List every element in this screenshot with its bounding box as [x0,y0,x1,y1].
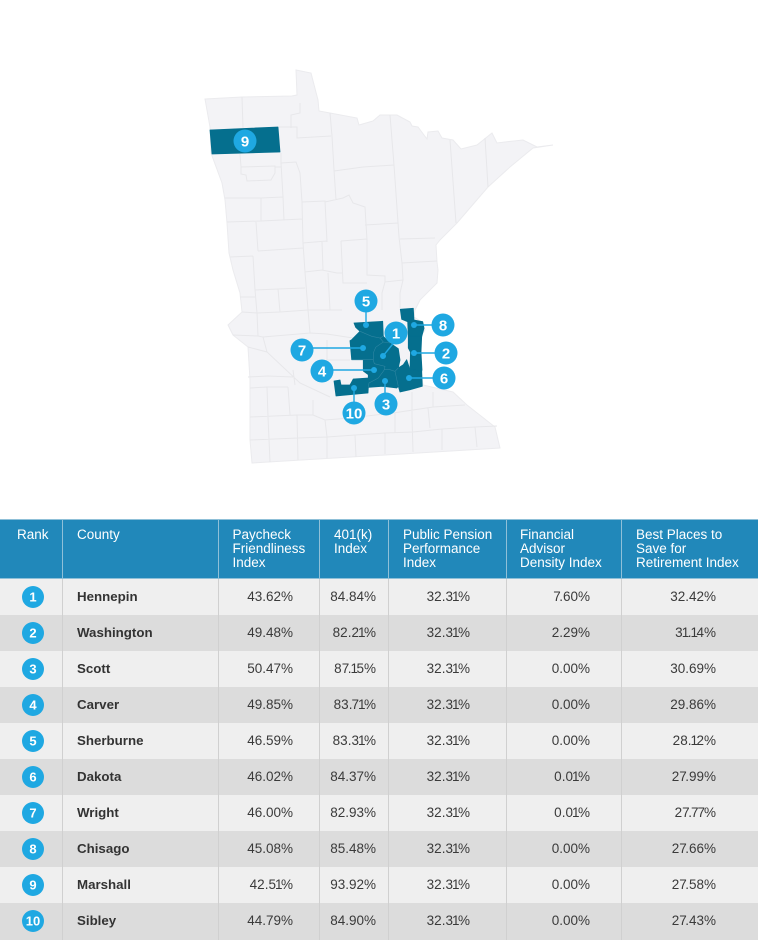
county boundaries [225,97,497,462]
row 10: Sibley: 32.31% [427,913,470,928]
row 8: Chisago: 27.66% [672,841,716,856]
table header: Best Places to [636,527,722,542]
row 4: Carver: 32.31% [427,697,470,712]
row 10: Sibley: 27.43% [672,913,716,928]
row 9: Marshall: 32.31% [427,877,470,892]
row 1: Hennepin: 7.60% [553,589,590,604]
row 5: Sherburne [22,730,716,752]
table header: Density Index [520,555,602,570]
state outline [205,70,553,463]
row 9: Marshall: Marshall [77,877,131,892]
table header: 401(k) [334,527,372,542]
row 8: Chisago: 85.48% [330,841,376,856]
table header: Financial [520,527,574,542]
row 1: Hennepin: 32.42% [670,589,716,604]
table header [0,519,758,579]
table header: Index [232,555,266,570]
row 10: Sibley: 84.90% [330,913,376,928]
row 5: Sherburne: 83.31% [333,733,376,748]
county: Washington [408,336,422,371]
county: Sibley [334,378,369,396]
table header: Friendliness [232,541,306,556]
row 9: Marshall: 0.00% [552,877,590,892]
table header: Paycheck [232,527,291,542]
marker 2 [411,342,458,364]
row 6: Dakota [22,766,716,788]
table header: Rank [17,527,49,542]
row 5: Sherburne: 5 [29,734,37,748]
row 10: Sibley [22,910,716,932]
table header: Performance [403,541,480,556]
row 6: Dakota: Dakota [77,769,122,784]
county: Hennepin [373,336,400,371]
row 6: Dakota: 27.99% [672,769,716,784]
row 5: Sherburne: 28.12% [673,733,716,748]
marker 8 [411,314,454,336]
row 4: Carver: 0.00% [552,697,590,712]
row 10: Sibley: 0.00% [552,913,590,928]
marker 10: 10 [346,406,362,422]
row 5: Sherburne: 46.59% [247,733,293,748]
row 7: Wright [22,802,716,824]
row 7: Wright: 32.31% [427,805,470,820]
row 7: Wright: 0.01% [554,805,590,820]
row 9: Marshall: 27.58% [672,877,716,892]
row 2: Washington: 32.31% [427,625,470,640]
row 1: Hennepin: 84.84% [330,589,376,604]
row 2: Washington: 31.14% [675,625,716,640]
county: Carver [363,360,385,383]
row 8: Chisago: 0.00% [552,841,590,856]
row 8: Chisago: 32.31% [427,841,470,856]
row 4: Carver: 49.85% [247,697,293,712]
table header: Retirement Index [636,555,739,570]
marker 1 [380,322,408,359]
marker 3 [374,378,398,416]
row 9: Marshall: 9 [29,878,37,892]
marker 7: 7 [298,342,306,360]
row 3: Scott: 87.15% [334,661,376,676]
marker 10 [342,385,366,424]
row 7: Wright: 7 [29,806,37,820]
row 2: Washington: 49.48% [247,625,293,640]
row 8: Chisago [22,838,716,860]
row 7: Wright: 82.93% [330,805,376,820]
county: Chisago [400,308,424,337]
row 4: Carver: 83.71% [334,697,376,712]
row 2: Washington: 2.29% [552,625,590,640]
row 9: Marshall [22,874,716,896]
county: Dakota [395,360,422,392]
marker 4: 4 [318,364,327,380]
row 5: Sherburne: Sherburne [77,733,144,748]
county: Marshall [210,127,280,154]
marker 4 [310,360,377,382]
row 10: Sibley: 10 [26,914,40,928]
marker 5 [354,290,378,328]
row 10: Sibley: 44.79% [247,913,293,928]
table header: Save for [636,541,687,556]
county: Wright [350,331,383,360]
row 10: Sibley: Sibley [77,913,117,928]
row 8: Chisago: Chisago [77,841,129,856]
marker 3: 3 [382,396,390,414]
county: Scott [368,370,398,388]
row 8: Chisago: 8 [29,842,37,856]
boundaries between highlighted counties [352,331,398,387]
row 1: Hennepin: 43.62% [247,589,293,604]
ranking table [0,519,758,940]
row 4: Carver: Carver [77,697,119,712]
table header: Index [403,555,436,570]
table header: County [77,527,120,542]
row 6: Dakota: 46.02% [247,769,293,784]
row 2: Washington: 82.21% [333,625,376,640]
marker 1: 1 [392,326,400,342]
row 7: Wright: 46.00% [247,805,293,820]
row 2: Washington: Washington [77,625,153,640]
row 6: Dakota: 0.01% [554,769,590,784]
row 3: Scott [22,658,716,680]
marker 7 [290,338,366,362]
row 9: Marshall: 42.51% [250,877,293,892]
row 5: Sherburne: 32.31% [427,733,470,748]
marker 9 [234,130,256,152]
row 6: Dakota: 84.37% [330,769,376,784]
row 6: Dakota: 32.31% [427,769,470,784]
row 4: Carver: 29.86% [670,697,716,712]
marker 2: 2 [442,346,450,362]
row 7: Wright: Wright [77,805,119,820]
table header: Index [334,541,367,556]
row 4: Carver: 4 [29,698,37,712]
row 3: Scott: 3 [29,662,37,676]
row 3: Scott: 0.00% [552,661,590,676]
row 5: Sherburne: 0.00% [552,733,590,748]
row 1: Hennepin: 32.31% [427,589,470,604]
table header: Advisor [520,541,566,556]
row 7: Wright: 27.77% [675,805,716,820]
marker 8: 8 [439,318,447,334]
row 2: Washington: 2 [29,626,37,640]
row 1: Hennepin: 1 [29,590,37,604]
row 2: Washington [22,622,716,644]
marker 6: 6 [440,370,448,388]
marker 6 [406,366,456,390]
row 6: Dakota: 6 [29,770,37,784]
row 3: Scott: 32.31% [427,661,470,676]
county: Sherburne [354,321,383,338]
table header: Public Pension [403,527,492,542]
row 3: Scott: Scott [77,661,111,676]
row 3: Scott: 30.69% [670,661,716,676]
row 1: Hennepin: Hennepin [77,589,138,604]
row backgrounds [0,579,758,940]
map of Minnesota counties [205,70,553,463]
row 1: Hennepin [22,586,716,608]
row 4: Carver [22,694,716,716]
row 8: Chisago: 45.08% [247,841,293,856]
row 9: Marshall: 93.92% [330,877,376,892]
row 3: Scott: 50.47% [247,661,293,676]
marker 5: 5 [362,294,370,310]
marker 9: 9 [241,134,249,150]
